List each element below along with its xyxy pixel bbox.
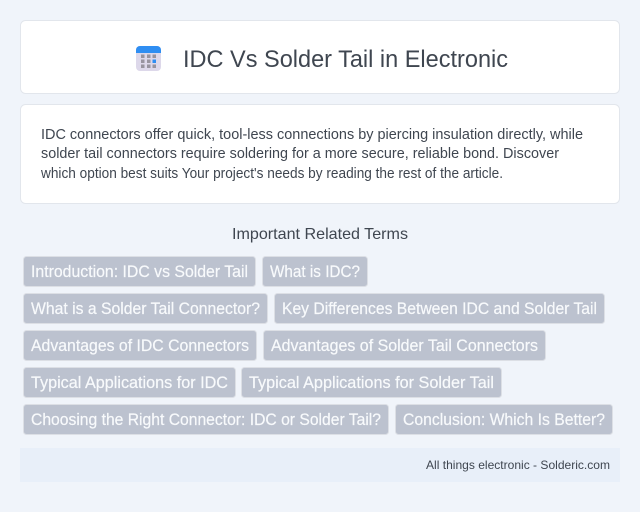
tag bbox=[24, 256, 256, 286]
tag bbox=[264, 330, 546, 360]
tag bbox=[274, 294, 604, 324]
tag: Choosing the Right Connector: IDC or Solder Tail? bbox=[31, 411, 381, 429]
intro paragraph: solder tail connectors require soldering for a more secure, reliable bond. Discover bbox=[41, 146, 559, 162]
tag: Typical Applications for Solder Tail bbox=[249, 374, 494, 392]
tag: Typical Applications for IDC bbox=[31, 374, 228, 392]
heading: important related terms: Important Related Terms bbox=[232, 226, 408, 243]
tag: Key Differences Between IDC and Solder Tail bbox=[282, 300, 597, 318]
tag: What is a Solder Tail Connector? bbox=[31, 300, 260, 318]
intro paragraph: IDC connectors offer quick, tool-less connections by piercing insulation directly, while bbox=[41, 127, 583, 143]
tag: Advantages of Solder Tail Connectors bbox=[271, 337, 538, 355]
panel: header bbox=[20, 20, 620, 94]
tag bbox=[262, 256, 368, 286]
tag bbox=[24, 294, 268, 324]
tag bbox=[24, 368, 236, 398]
intro paragraph: which option best suits Your project's needs by reading the rest of the article. bbox=[40, 166, 503, 182]
tag: What is IDC? bbox=[270, 263, 360, 281]
tag bbox=[24, 330, 256, 360]
footer bar bbox=[20, 448, 620, 482]
intro paragraph bbox=[40, 127, 583, 182]
tag bbox=[242, 368, 502, 398]
tag bbox=[24, 404, 388, 434]
icon: calendar bbox=[136, 46, 161, 71]
panel: intro text bbox=[20, 104, 620, 204]
tag: Conclusion: Which Is Better? bbox=[403, 411, 605, 429]
footer text: All things electronic - Solderic.com bbox=[426, 458, 610, 472]
title: IDC Vs Solder Tail in Electronic bbox=[183, 46, 508, 73]
panel: related term tags bbox=[24, 256, 612, 434]
tag bbox=[396, 404, 612, 434]
tag: Introduction: IDC vs Solder Tail bbox=[31, 263, 248, 281]
tag: Advantages of IDC Connectors bbox=[31, 337, 249, 355]
